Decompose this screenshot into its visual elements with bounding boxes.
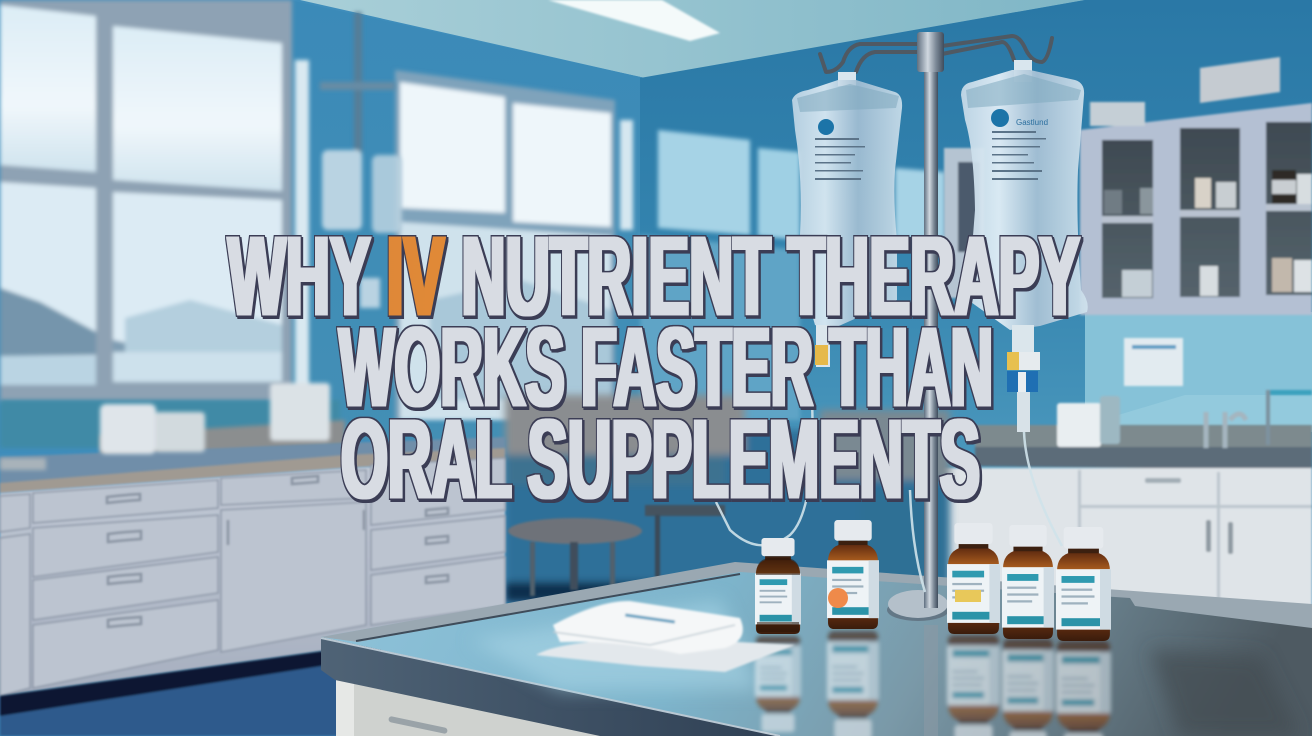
drawers <box>0 458 505 696</box>
bag brand text: Gastlund <box>1016 118 1048 127</box>
back door frame <box>944 148 984 298</box>
bottle reflections <box>755 631 1111 736</box>
ceiling <box>300 0 1085 78</box>
ghost IV stand on the left wall <box>320 12 402 308</box>
bottle 4 <box>1002 525 1054 639</box>
bag logo <box>991 109 1009 127</box>
wall sunlight patches <box>640 130 945 420</box>
title <box>228 213 1080 522</box>
upper wall cabinets <box>1080 102 1312 315</box>
stool <box>508 505 725 596</box>
distant hills <box>0 288 96 356</box>
left windows <box>0 0 309 410</box>
middle window <box>395 70 633 420</box>
table cabinet handle <box>388 716 448 734</box>
IV bag: left <box>792 72 902 367</box>
IV pole base <box>887 590 949 736</box>
faucet <box>1206 412 1246 448</box>
left wall <box>290 0 645 440</box>
table top <box>321 563 1312 736</box>
countertop <box>0 437 505 493</box>
IV pole <box>924 60 938 608</box>
table back rim <box>321 562 1312 642</box>
right counter and base cabinets <box>940 390 1312 618</box>
light wall below cabinets <box>1085 312 1312 432</box>
bottle 3 <box>947 523 1000 634</box>
right wall <box>640 0 1312 470</box>
IV hook arms <box>820 36 1052 72</box>
lab equipment on counter <box>0 383 330 470</box>
wall sign <box>1200 57 1280 103</box>
bag label lines <box>992 131 1046 180</box>
wall rack <box>1268 392 1312 445</box>
bottle 5 <box>1056 527 1111 641</box>
IV tubing <box>716 400 1062 592</box>
centre background: stool and dark room <box>505 395 950 620</box>
window reflection <box>470 600 1300 736</box>
stainless table <box>321 562 1312 736</box>
countertop edge <box>0 448 505 493</box>
IV pole clamp <box>917 32 944 72</box>
bottle 1 <box>755 538 801 634</box>
IV bag: right <box>961 60 1088 432</box>
bag logo <box>818 119 834 135</box>
floor <box>0 612 505 736</box>
jars on shelves <box>1122 270 1152 297</box>
table front cabinet <box>336 676 620 736</box>
bottle 2 <box>827 520 879 629</box>
bag label lines <box>815 138 865 180</box>
ceiling light <box>548 0 720 41</box>
left counter and drawers <box>0 383 505 696</box>
table front rim <box>321 637 780 736</box>
wall notice panel <box>1124 338 1183 386</box>
gauze pad <box>536 601 795 672</box>
drawer handles <box>107 476 448 627</box>
paper cup <box>1057 403 1101 447</box>
box on cabinet <box>1090 102 1145 126</box>
cabinet body <box>0 460 505 696</box>
